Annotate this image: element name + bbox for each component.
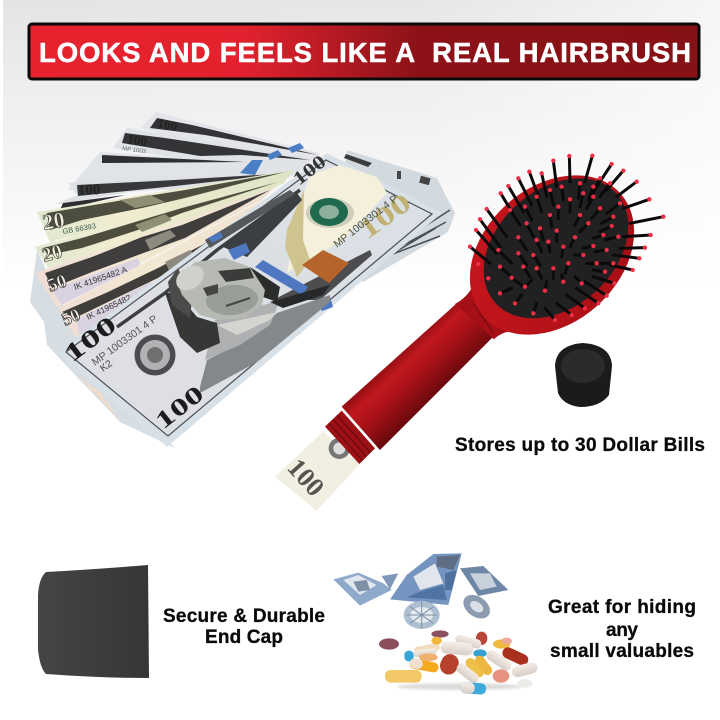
50 dollar bills [35, 187, 288, 337]
caption: secure and durable end cap: Secure & Durable [163, 606, 325, 627]
50 dollar bills: 50 [58, 304, 83, 330]
ribbon wedge [270, 285, 330, 308]
20 dollar bills [35, 170, 293, 268]
rolled bill sticking out of the handle: 100 [282, 452, 331, 502]
under layers of bills [30, 150, 455, 448]
illustration: fan of dollar bills [30, 112, 455, 448]
icon: secure end cap [38, 565, 149, 678]
corner numerals and serials: K2 [98, 358, 115, 374]
federal reserve seal [134, 334, 176, 376]
copper bell [302, 250, 349, 283]
blue security ribbon [208, 232, 333, 311]
gold 100: 100 [353, 187, 417, 245]
hair [165, 293, 220, 353]
corner numerals and serials [59, 151, 400, 435]
corner numerals and serials: 100 [289, 151, 330, 190]
corner numerals and serials: 100 [59, 311, 122, 368]
illustration: pills [379, 630, 539, 695]
caption: great for hiding any small valuables: any [606, 620, 638, 641]
caption: stores up to 30 dollar bills: Stores up to 30 Dollar Bills [455, 435, 705, 456]
brush handle [325, 303, 493, 464]
corner numerals and serials: MP 1003301 4 P [331, 193, 400, 250]
back 100 dollar bills: 100 [78, 182, 101, 199]
corner numerals and serials: MP 1003301 4 P [90, 313, 160, 368]
portrait of Franklin [165, 258, 330, 393]
title banner [29, 24, 699, 79]
bristle tips [470, 156, 663, 320]
main 100 dollar bill [57, 151, 442, 447]
caption: great for hiding any small valuables: Great for hiding [548, 597, 696, 618]
back 100 dollar bills [53, 112, 320, 210]
green seal [306, 198, 354, 228]
rolled bill sticking out of the handle [275, 432, 360, 511]
icon: removed end cap beside brush [555, 343, 612, 407]
50 dollar bills: IK 41965482 [85, 292, 133, 322]
title text: LOOKS AND FEELS LIKE A REAL HAIRBRUSH [39, 37, 691, 68]
head and face [176, 258, 265, 320]
50 dollar bills: 50 [45, 271, 70, 297]
back 100 dollar bills: 100 [127, 131, 148, 149]
eyes and brow [218, 268, 254, 282]
dark engraving blocks [205, 190, 372, 300]
caption: great for hiding any small valuables [548, 597, 696, 662]
watermark and quill [285, 165, 387, 277]
20 dollar bills: 20 [41, 206, 67, 235]
50 dollar bills: IK 41965482 A [72, 264, 129, 292]
illustration: red hairbrush [275, 143, 666, 511]
corner numerals and serials: 100 [151, 381, 209, 435]
cushion [456, 150, 656, 347]
bristles [470, 156, 663, 320]
back 100 dollar bills: 100 [156, 115, 179, 134]
caption: secure and durable end cap [163, 606, 325, 648]
20 dollar bills: GB 66393 [62, 221, 97, 236]
brush head [438, 143, 666, 367]
collar [217, 312, 277, 335]
caption: secure and durable end cap: End Cap [205, 627, 283, 648]
20 dollar bills: 20 [40, 240, 65, 267]
caption: great for hiding any small valuables: small valuables [550, 641, 694, 662]
jacket [200, 295, 330, 393]
illustration: diamonds [333, 553, 508, 629]
back 100 dollar bills: MP 1003 [122, 146, 147, 155]
